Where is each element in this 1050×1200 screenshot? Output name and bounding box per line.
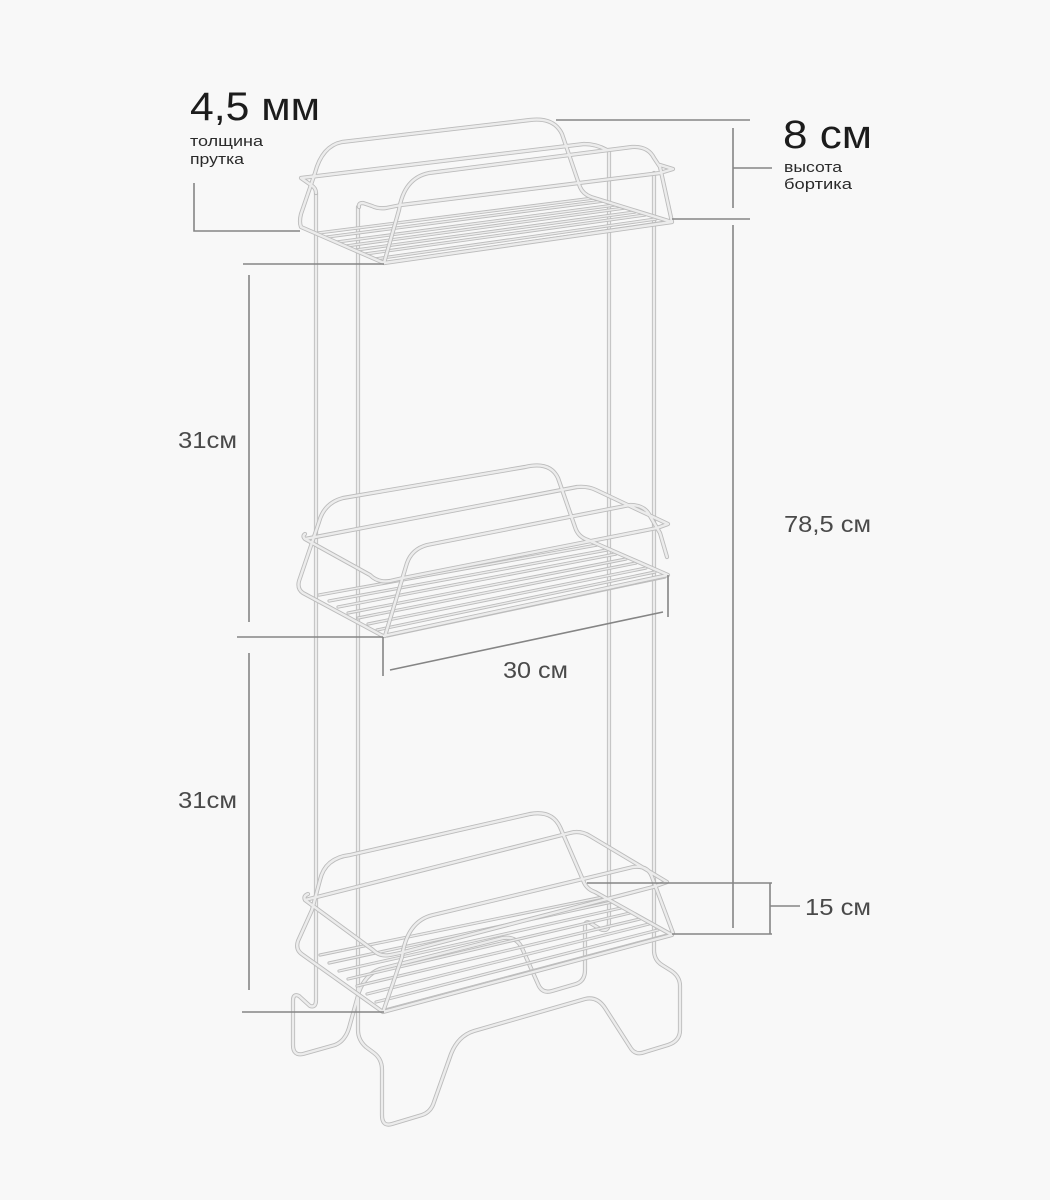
dimension: lower shelf spacing lines <box>242 653 384 1012</box>
rim height label: высота <box>784 159 843 176</box>
rim height label line 2: бортика <box>784 176 853 193</box>
dimension: upper shelf spacing lines <box>237 264 384 637</box>
dimension: total height line <box>732 225 734 928</box>
top shelf <box>300 120 673 263</box>
callout: rod thickness leader <box>194 183 300 231</box>
middle shelf <box>298 465 668 636</box>
upper spacing value: 31см <box>178 427 237 453</box>
rod thickness value: 4,5 мм <box>190 85 320 129</box>
lower spacing value: 31см <box>178 787 237 813</box>
rim height value: 8 см <box>783 113 872 157</box>
wire rack <box>293 120 680 1125</box>
dimension: shelf width lines <box>383 575 668 676</box>
rod thickness label line 2: прутка <box>190 151 245 168</box>
shelf width value: 30 см <box>503 657 568 683</box>
dimension: rim height lines <box>556 120 772 219</box>
bottom shelf <box>297 813 673 1012</box>
dimension: lower clearance lines <box>587 883 800 934</box>
lower clearance value: 15 см <box>805 894 871 920</box>
total height value: 78,5 см <box>784 511 871 537</box>
rack legs and base <box>293 150 680 1125</box>
rod thickness label: толщина <box>190 133 264 150</box>
